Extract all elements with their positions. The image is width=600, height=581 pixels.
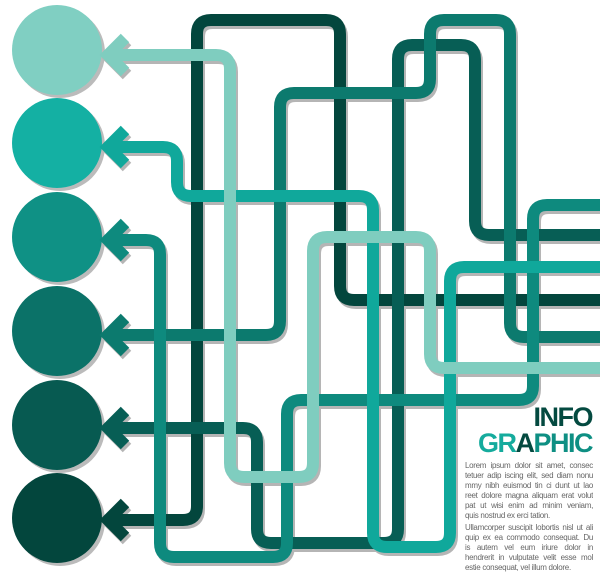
text block: reet dolore magna aliquam erat volut <box>465 491 593 500</box>
title <box>478 402 593 458</box>
pipe: mid-dark <box>108 20 600 352</box>
text block: pat ut wisi enim ad minim veniam, <box>465 501 593 510</box>
pipe: dark <box>108 45 600 543</box>
text block: mmy nibh euismod tin ci dunt ut lao <box>465 481 593 490</box>
title: GRAPHIC <box>478 428 592 458</box>
text block: hendrerit in vulputate velit esse mol <box>465 553 593 562</box>
text block <box>465 461 593 572</box>
title: INFO <box>534 402 592 432</box>
circles <box>12 5 105 566</box>
pipes <box>108 20 600 560</box>
pipe: teal <box>108 130 600 547</box>
text block: Ullamcorper suscipit lobortis nisl ut ali <box>465 523 593 532</box>
text block: tetuer adip iscing elit, sed diam nonu <box>465 471 593 480</box>
text block: is autem vel eum iriure dolor in <box>465 543 593 552</box>
pipe: darkest <box>108 20 600 537</box>
text block: quis nostrud ex erci tation. <box>465 511 550 520</box>
pipe: light <box>108 38 600 477</box>
text block: estie consequat, vel illum dolore. <box>465 563 571 572</box>
text block: quip ex ea commodo consequat. Du <box>465 533 593 542</box>
pipe: mid <box>108 205 600 557</box>
text block: Lorem ipsum dolor sit amet, consec <box>465 461 593 470</box>
